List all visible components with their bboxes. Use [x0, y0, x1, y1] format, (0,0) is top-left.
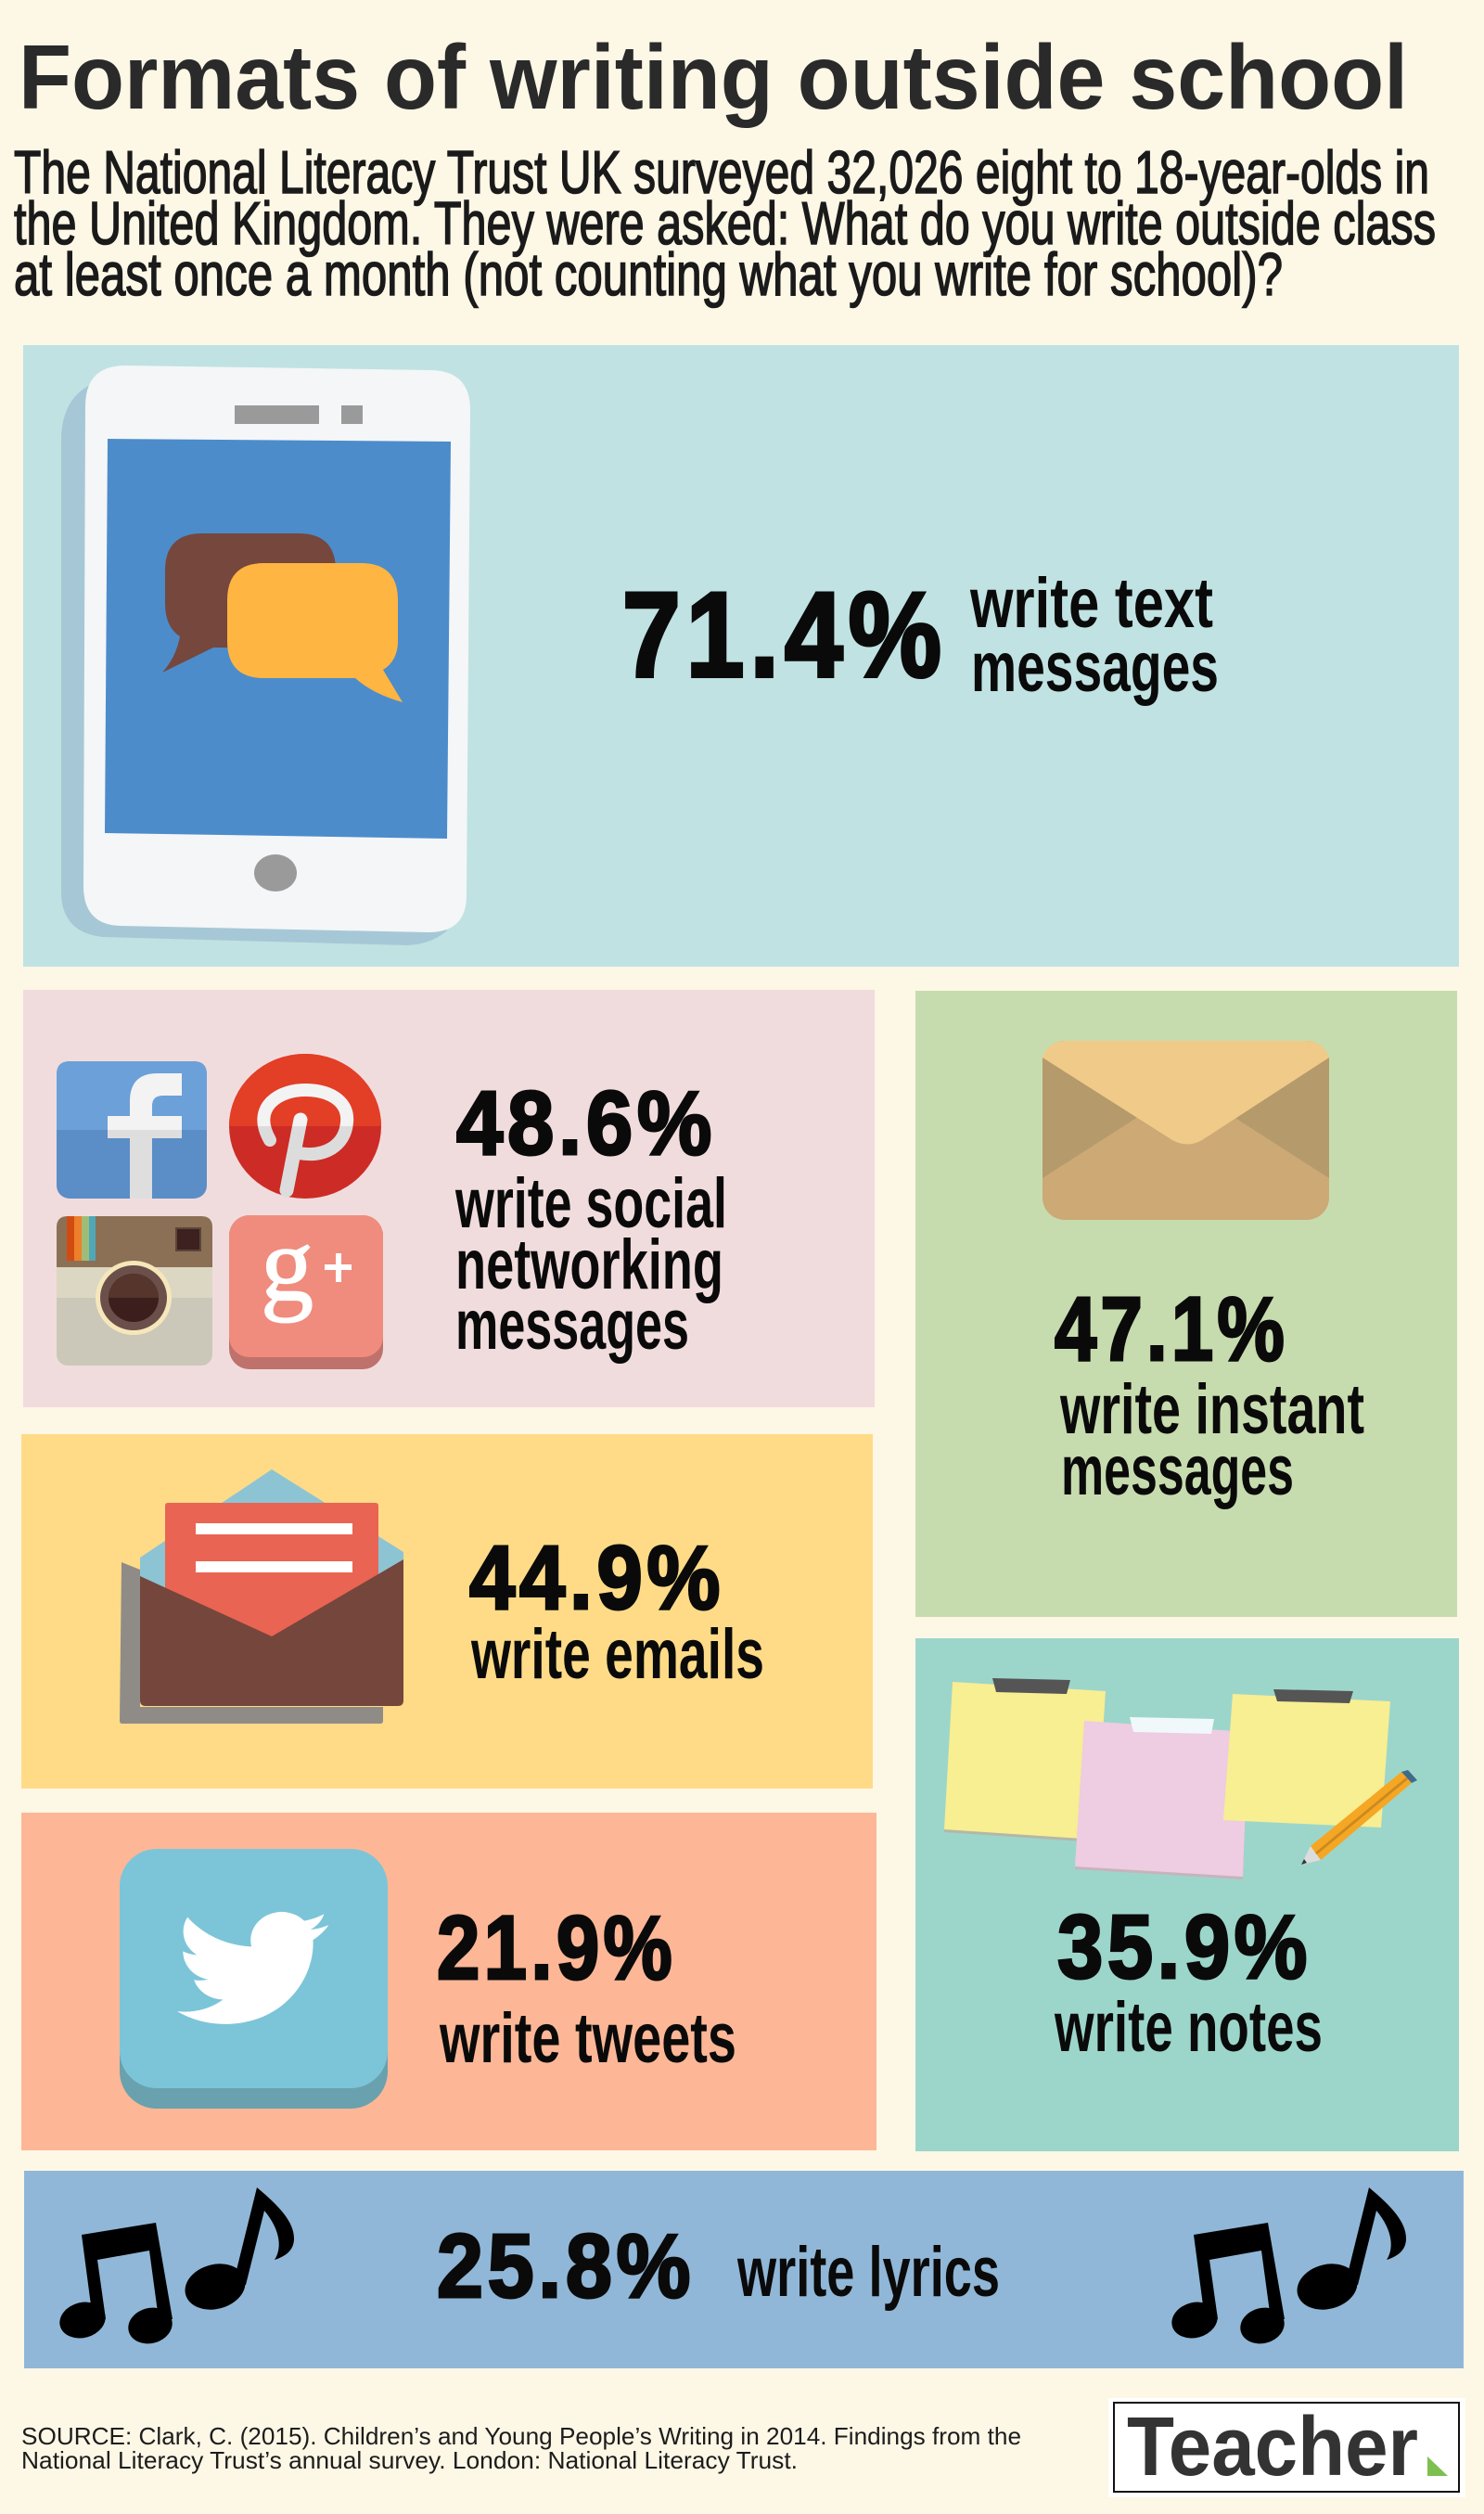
label: write instant messages: messages	[1061, 1431, 1294, 1510]
panel: notes	[915, 1638, 1459, 2151]
label: write social networking messages	[454, 1164, 727, 1365]
icon: open envelope	[120, 1469, 403, 1724]
stat: 47.1%: 47.1%	[1055, 1278, 1288, 1379]
source citation	[21, 2422, 1021, 2474]
label: write social networking messages: networking	[455, 1225, 723, 1304]
label: write emails: write emails	[470, 1615, 764, 1694]
icon: google plus	[229, 1205, 383, 1369]
source citation: SOURCE: Clark, C. (2015). Children’s and Young People’s Writing in 2014. Findings from the	[21, 2422, 1021, 2450]
label: write text messages	[969, 564, 1219, 707]
stat: 48.6%: 48.6%	[456, 1072, 716, 1174]
icon: twitter	[120, 1849, 388, 2109]
icon: smartphone with chat bubbles	[61, 366, 470, 945]
source citation: National Literacy Trust’s annual survey. London: National Literacy Trust.	[21, 2446, 798, 2474]
intro text	[14, 138, 1436, 308]
icon: google plus: g	[261, 1205, 313, 1323]
icon: music notes right	[1168, 2187, 1406, 2349]
label: write instant messages: write instant	[1059, 1370, 1364, 1449]
title: Formats of writing outside school	[19, 26, 1408, 128]
stat: 35.9%: 35.9%	[1057, 1896, 1311, 1997]
stat: 71.4%: 71.4%	[622, 567, 947, 702]
panel: emails	[21, 1434, 873, 1789]
icon: music notes left	[56, 2187, 294, 2349]
icon: facebook	[57, 1061, 207, 1199]
panel: tweets	[21, 1813, 876, 2150]
label: write lyrics: write lyrics	[736, 2233, 1000, 2312]
logo: Teacher: Teacher	[1127, 2401, 1418, 2494]
label: write instant messages	[1059, 1370, 1364, 1510]
icon: pinterest	[229, 1054, 381, 1199]
panel: instant messages	[915, 991, 1457, 1617]
stat: 44.9%: 44.9%	[469, 1527, 724, 1628]
label: write social networking messages: messages	[455, 1286, 689, 1365]
stat: 21.9%: 21.9%	[437, 1897, 676, 1998]
icon: instagram	[57, 1216, 212, 1366]
label: write tweets: write tweets	[439, 1999, 736, 2078]
panel: lyrics	[24, 2171, 1464, 2368]
label: write notes: write notes	[1054, 1988, 1323, 2067]
panel: social networking	[23, 990, 875, 1407]
label: write social networking messages: write social	[454, 1164, 727, 1243]
icon: sticky notes and pencil	[944, 1678, 1417, 1879]
label: write text messages: write text	[969, 564, 1213, 643]
icon: closed envelope	[1043, 1041, 1329, 1220]
panel: text messages	[23, 345, 1459, 967]
stat: 25.8%: 25.8%	[437, 2215, 695, 2316]
label: write text messages: messages	[971, 628, 1219, 707]
